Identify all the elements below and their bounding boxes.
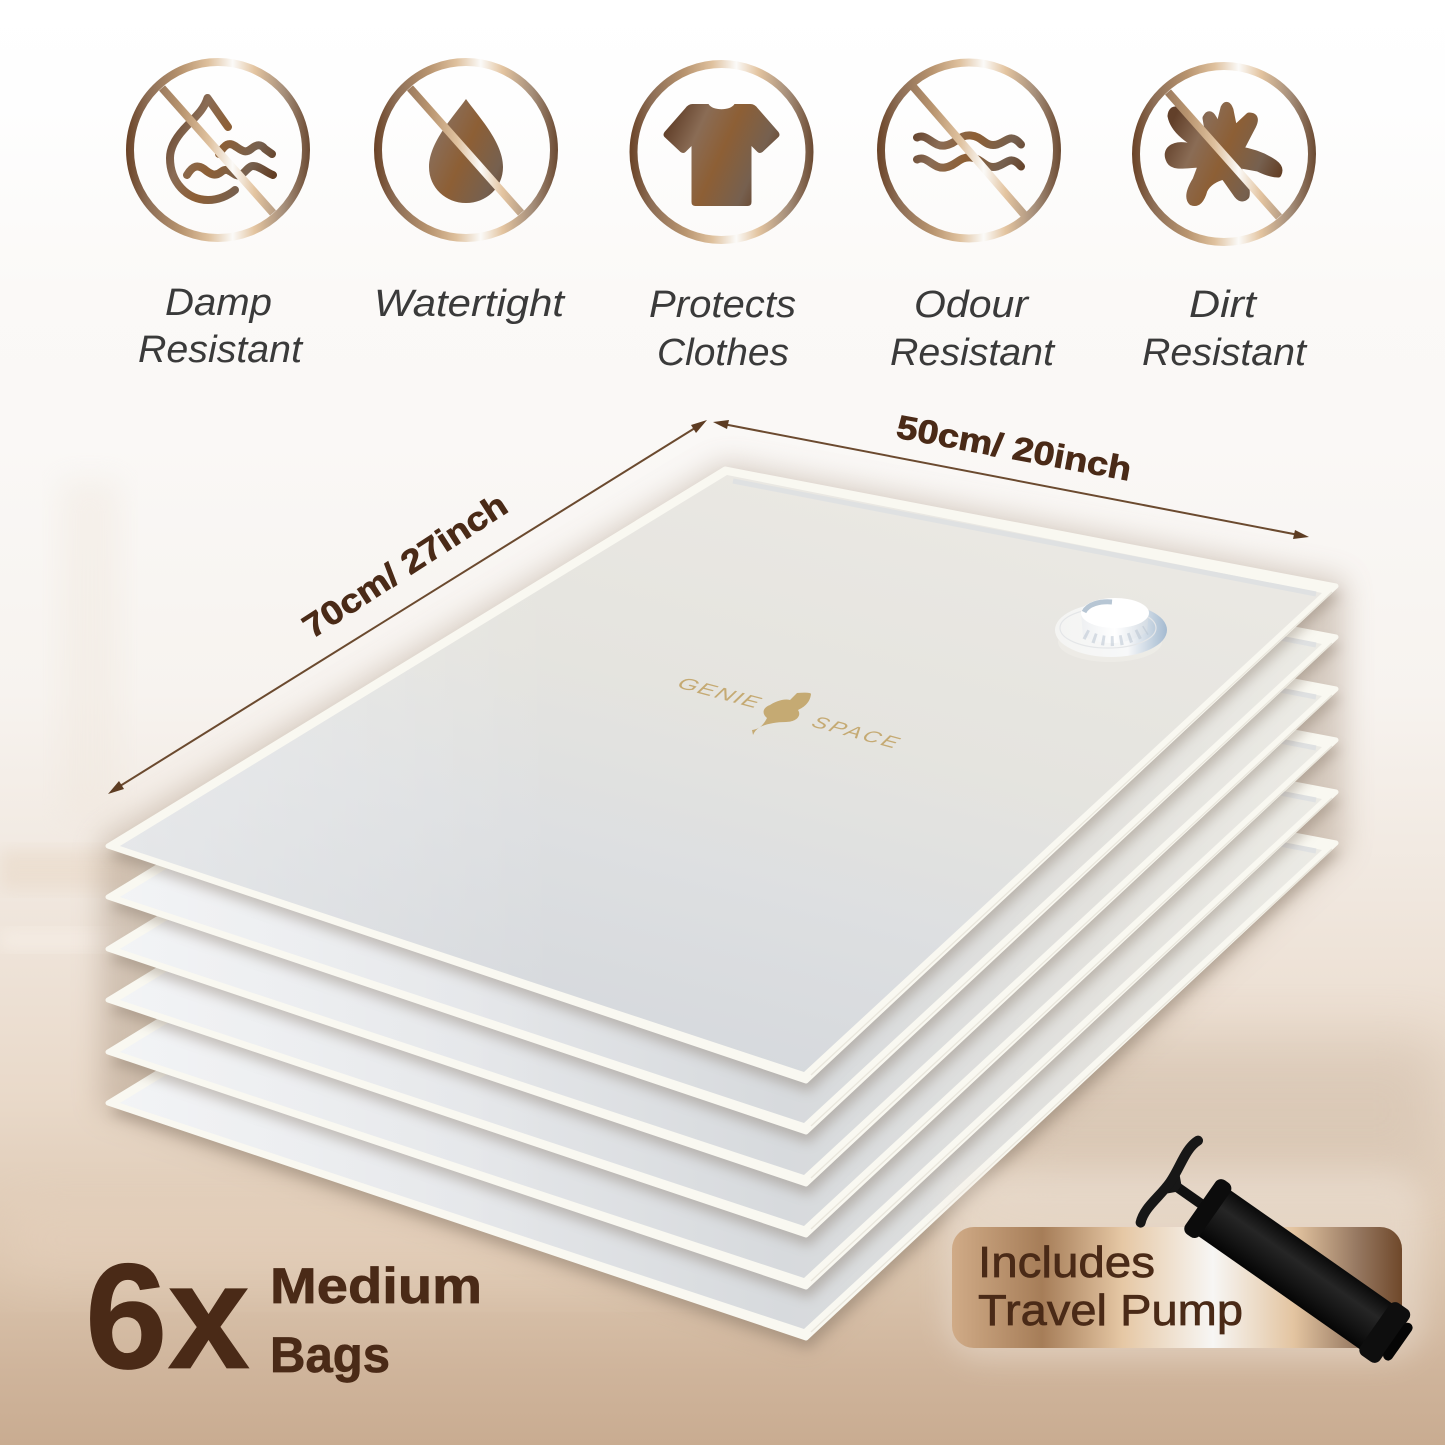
logo text: GENIE: GENIE bbox=[674, 673, 766, 712]
product size: medium bags bbox=[270, 1258, 482, 1383]
label: damp resistant bbox=[138, 282, 303, 371]
valve bbox=[1055, 598, 1167, 662]
label: dirt resistant bbox=[1142, 284, 1307, 374]
badge: 6x medium bags bbox=[85, 1232, 482, 1400]
bag 4 bbox=[108, 623, 1341, 1246]
feature labels bbox=[138, 282, 1307, 374]
icon: travel pump bbox=[1139, 1139, 1431, 1385]
label: protects clothes: Protects bbox=[649, 284, 796, 326]
label: dirt resistant: Resistant bbox=[1142, 332, 1307, 374]
bag 1 (top) bbox=[108, 469, 1341, 1092]
icon: damp resistant bbox=[130, 62, 306, 238]
label: damp resistant: Damp bbox=[165, 282, 272, 324]
label: dirt resistant: Dirt bbox=[1189, 284, 1258, 326]
dimension label: 70cm: 70cm/ 27inch bbox=[296, 486, 514, 645]
label: odour resistant: Odour bbox=[914, 284, 1029, 326]
callout: includes travel pump bbox=[945, 1139, 1431, 1385]
callout text: Includes bbox=[978, 1238, 1155, 1287]
logo text: SPACE: SPACE bbox=[808, 712, 906, 753]
logo icon: genie flame bbox=[752, 693, 811, 735]
bag 6 bbox=[108, 726, 1341, 1349]
icon: watertight bbox=[378, 62, 554, 238]
icon: dirt resistant bbox=[1136, 66, 1312, 242]
icon row bbox=[130, 62, 1312, 242]
count: 6x: 6x bbox=[85, 1232, 250, 1400]
label: odour resistant: Resistant bbox=[890, 332, 1055, 374]
product size: medium bags: Bags bbox=[270, 1327, 390, 1383]
label: protects clothes bbox=[649, 284, 796, 374]
dimension arrow: width bbox=[713, 420, 1309, 539]
bag 3 bbox=[108, 572, 1341, 1195]
bag 2 bbox=[108, 520, 1341, 1143]
stack of six bags bbox=[108, 469, 1341, 1349]
bag 5 bbox=[108, 675, 1341, 1298]
label: odour resistant bbox=[890, 284, 1055, 374]
dimension label: 50cm: 50cm/ 20inch bbox=[894, 408, 1134, 488]
callout text: Travel Pump bbox=[978, 1286, 1243, 1335]
dimension arrow: length bbox=[108, 420, 707, 794]
label: watertight: Watertight bbox=[374, 283, 566, 325]
product size: medium bags: Medium bbox=[270, 1258, 482, 1314]
label: damp resistant: Resistant bbox=[138, 329, 303, 371]
callout panel bbox=[952, 1227, 1402, 1348]
icon: odour resistant bbox=[881, 62, 1057, 238]
callout text bbox=[978, 1238, 1243, 1335]
label: protects clothes: Clothes bbox=[657, 332, 789, 374]
brand logo bbox=[674, 673, 906, 753]
icon: protects clothes bbox=[634, 64, 810, 240]
